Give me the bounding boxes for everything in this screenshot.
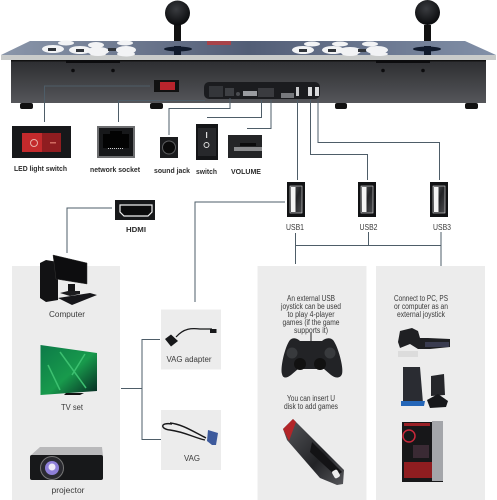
text: external joystick note: games (if the game bbox=[282, 318, 340, 327]
buttons bbox=[42, 40, 388, 56]
icon: USB2 port bbox=[358, 182, 376, 217]
icon: projector bbox=[30, 447, 103, 480]
label: HDMI: HDMI bbox=[126, 225, 146, 234]
text: U disk note: You can insert U bbox=[287, 394, 335, 403]
panel: console connections bbox=[376, 266, 485, 500]
text: external joystick note bbox=[280, 294, 341, 335]
joystick left bbox=[165, 0, 190, 49]
panel: display devices bbox=[12, 255, 120, 500]
icon: game consoles bbox=[401, 367, 448, 408]
label: USB1: USB1 bbox=[286, 223, 304, 232]
icon: power switch bbox=[196, 124, 218, 160]
label: LED light switch: LED light switch bbox=[14, 164, 67, 173]
icon: gamepad bbox=[282, 333, 342, 378]
label: VOLUME: VOLUME bbox=[231, 167, 261, 176]
text: connect note: Connect to PC, PS bbox=[394, 294, 448, 303]
text: U disk note: disk to add games bbox=[284, 402, 338, 411]
text: U disk note bbox=[284, 394, 338, 411]
screws bbox=[66, 60, 430, 72]
text: external joystick note: supports it) bbox=[294, 326, 328, 335]
label: USB3: USB3 bbox=[433, 223, 451, 232]
icon: sound jack bbox=[160, 137, 178, 158]
connector lines bbox=[44, 86, 441, 440]
feet bbox=[20, 103, 478, 109]
icon: LED light switch bbox=[12, 126, 71, 158]
label: VAG: VAG bbox=[184, 454, 200, 463]
text: connect note: or computer as an bbox=[394, 302, 448, 311]
icon: TV set bbox=[40, 345, 97, 395]
icon: USB3 port bbox=[430, 182, 448, 217]
icon: network socket bbox=[97, 126, 135, 158]
panel: USB joystick and U disk bbox=[258, 266, 366, 500]
text: external joystick note: to play 4-player bbox=[288, 310, 335, 319]
panel: VAG cable bbox=[161, 410, 221, 470]
text: external joystick note: An external USB bbox=[287, 294, 335, 303]
label: network socket: network socket bbox=[90, 165, 140, 174]
icon: USB flash drive bbox=[283, 419, 344, 485]
top panel bbox=[1, 41, 496, 60]
joystick right bbox=[415, 0, 440, 49]
icon: VAG adapter cable bbox=[165, 329, 216, 346]
label: TV set: TV set bbox=[61, 403, 84, 412]
panel: VAG adapter bbox=[161, 310, 221, 370]
LED rocker on console bbox=[154, 80, 179, 92]
label: Computer: Computer bbox=[49, 310, 85, 319]
icon: USB1 port bbox=[287, 182, 305, 217]
icon: gaming PC bbox=[402, 421, 443, 482]
text: external joystick note: joystick can be used bbox=[280, 302, 341, 311]
icon: console with controller bbox=[398, 328, 450, 357]
label: USB2: USB2 bbox=[360, 223, 378, 232]
icon: computer bbox=[40, 255, 97, 305]
text: connect note: external joystick bbox=[397, 310, 446, 319]
icon: HDMI port bbox=[115, 200, 155, 220]
icon: VAG cable bbox=[163, 423, 218, 445]
port strip bbox=[204, 82, 320, 99]
icon: volume port bbox=[228, 135, 262, 158]
console body bbox=[11, 60, 486, 103]
text: connect note bbox=[394, 294, 448, 319]
arcade console bbox=[1, 0, 496, 109]
label: sound jack: sound jack bbox=[154, 166, 191, 175]
label: switch: switch bbox=[196, 167, 217, 176]
label: projector: projector bbox=[52, 486, 85, 495]
joystick bases bbox=[164, 46, 441, 55]
label: VAG adapter: VAG adapter bbox=[166, 355, 212, 364]
